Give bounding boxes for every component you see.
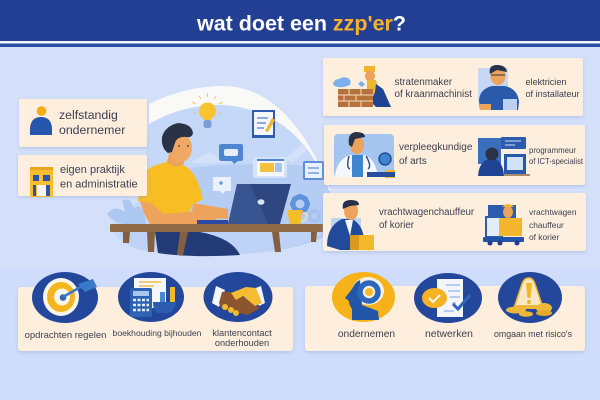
icon: building [30,167,53,197]
icon: small chat [213,177,231,194]
icon: window with chart [253,157,287,178]
label: of ICT-specialist [529,156,584,166]
label: programmeur [529,145,576,155]
label: elektricien [526,77,566,87]
label: vrachtwagenchauffeur [379,207,475,218]
panel: verpleegkundige / programmeur [324,125,585,185]
torso [138,160,203,215]
label: of korier [529,232,559,242]
icon: warning and coins [498,272,562,323]
panel: vrachtwagenchauffeur [323,193,586,251]
label: ondernemen [338,329,395,340]
icon: light bulb [192,93,223,128]
icon: handshake [204,272,272,322]
panel: stratenmaker / elektricien [323,58,583,116]
label: chauffeur [529,220,564,230]
icon: gear [290,194,319,221]
icon: person [30,106,52,135]
label: ondernemer [59,123,125,137]
icon: pinned note [304,162,323,179]
label: boekhouding bijhouden [113,328,202,338]
icon: chat bubble [219,144,243,164]
label: of korier [379,220,415,231]
face [170,134,192,162]
icon: delivery truck [483,204,524,246]
icon: bricklayer [333,66,391,107]
neck [167,150,184,167]
mug [287,210,307,225]
person [138,123,240,256]
icon: doctor [334,132,395,178]
label: of arts [399,156,427,167]
title: wat doet een zzp'er? [196,12,406,36]
label: vrachtwagen [529,207,577,217]
far arm [192,203,228,219]
label: en administratie [60,178,138,190]
label: stratenmaker [394,77,453,88]
label: eigen praktijk [60,164,125,176]
icon: checklist [414,273,482,323]
icon: target [32,272,98,323]
panel: eigen praktijk [18,155,147,197]
panel: taken rechts [305,272,585,351]
laptop [197,184,291,224]
icon: document with pencil [252,110,275,138]
label: onderhouden [215,338,269,348]
central illustration: freelancer at laptop [107,86,331,256]
legs [155,232,240,256]
icon: head with gear [332,272,395,322]
label: klantencontact [212,328,272,338]
label: opdrachten regelen [25,330,106,341]
panel: taken links [18,272,293,351]
label: of kraanmachinist [394,89,472,100]
icon: electrician [478,65,519,110]
icon: accounting [118,272,184,322]
icon: programmer [478,137,530,176]
table [110,224,323,255]
panel: zelfstandig ondernemer [19,99,147,147]
near arm [140,201,216,224]
plant [107,200,146,224]
label: netwerken [425,329,473,340]
hair [162,123,193,153]
label: of installateur [526,89,580,99]
white arc [149,86,331,191]
label: verpleegkundige [399,142,473,153]
header banner [0,0,600,47]
icon: courier in suit [327,200,374,250]
label: omgaan met risico's [494,329,573,339]
background blob [110,100,331,255]
label: zelfstandig [59,108,118,122]
